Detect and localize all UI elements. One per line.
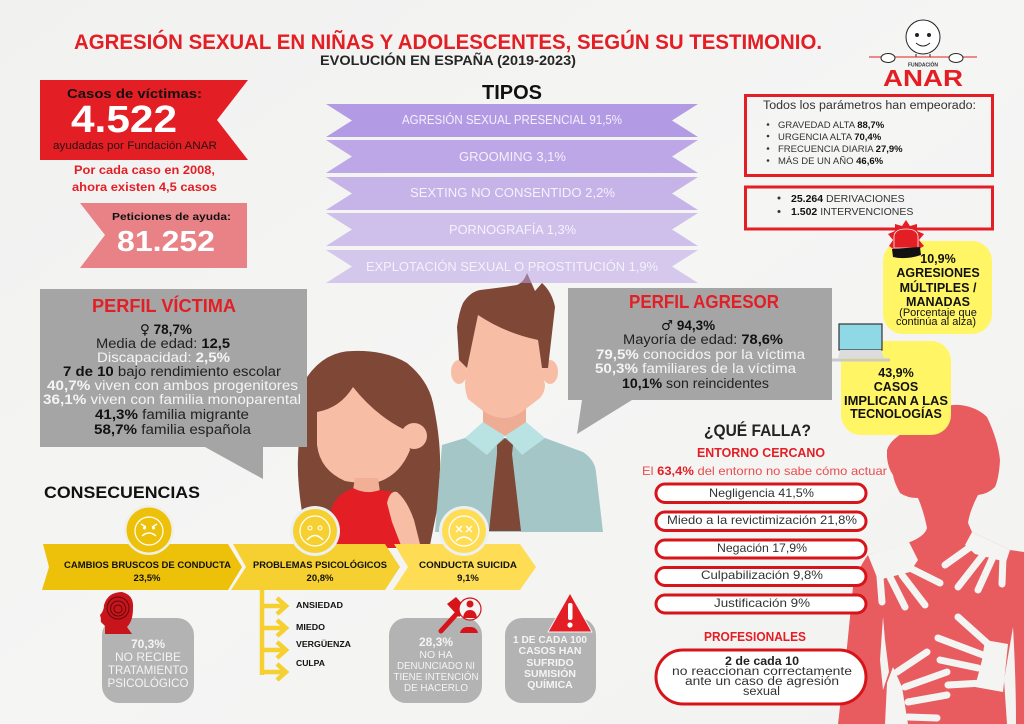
panel: tecnologías: TECNOLOGÍAS: [850, 406, 942, 421]
banner: peticiones de ayuda: [80, 203, 247, 268]
pill: profesionales: sexual: [743, 686, 780, 698]
panel: derivaciones e intervenciones: [746, 187, 992, 229]
pill: miedo a la revictimización: [656, 512, 866, 530]
arrow: problemas psicológicos: 20,8%: [307, 573, 334, 584]
icon: gavel and person: [441, 597, 481, 633]
panel: perfil víctima: Discapacidad: 2,5%: [97, 350, 230, 365]
panel: perfil víctima: 36,1% viven con familia monoparental: [43, 392, 301, 407]
panel: tecnologías: IMPLICAN A LAS: [844, 394, 948, 408]
pill: profesionales: ante un caso de agresión: [685, 676, 839, 688]
panel: tipos list: SEXTING NO CONSENTIDO 2,2%: [410, 185, 615, 200]
panel: sumisión química: SUFRIDO: [526, 657, 574, 669]
icon: siren: [888, 220, 924, 258]
arrow: conducta suicida: 9,1%: [457, 573, 479, 584]
panel: agresiones múltiples: continúa al alza): [896, 316, 976, 328]
panel: agresiones múltiples: AGRESIONES: [896, 266, 980, 280]
logo: Fundación ANAR: ANAR: [883, 65, 963, 91]
pill: negligencia: [656, 484, 866, 502]
panel: denuncia: DE HACERLO: [404, 682, 468, 694]
banner: casos de víctimas: ayudadas por Fundación ANAR: [53, 140, 217, 152]
pill: profesionales: no reaccionan correctamente: [672, 666, 852, 678]
panel: perfil víctima: Media de edad: 12,5: [96, 336, 231, 351]
panel: parámetros: GRAVEDAD ALTA 88,7%: [778, 120, 885, 131]
panel: denuncia: DENUNCIADO NI: [397, 660, 475, 672]
panel: sumisión química: CASOS HAN: [518, 645, 582, 657]
panel: tipos list: EXPLOTACIÓN SEXUAL O PROSTITUCIÓN 1,9%: [366, 259, 658, 274]
arrow: conducta suicida: [393, 544, 536, 590]
panel: perfil agresor: 50,3% familiares de la víctima: [595, 361, 797, 376]
banner: casos de víctimas: [40, 80, 248, 160]
list: problemas psicológicos: ANSIEDAD: [296, 601, 343, 610]
panel: perfil agresor: ♂ 94,3%: [661, 318, 715, 334]
list: problemas psicológicos: [296, 601, 351, 668]
pill: profesionales: [656, 650, 866, 704]
icon: head with spiral: [100, 592, 133, 634]
panel: parámetros: MÁS DE UN AÑO 46,6%: [778, 156, 884, 167]
panel: perfil agresor: Mayoría de edad: 78,6%: [623, 332, 783, 347]
panel: denuncia: NO HA: [419, 649, 453, 661]
pill: negligencia: Negligencia 41,5%: [709, 486, 814, 500]
pill: miedo a la revictimización: Miedo a la revictimización 21,8%: [667, 513, 857, 527]
pill: culpabilización: Culpabilización 9,8%: [701, 568, 823, 582]
pill: negación: Negación 17,9%: [717, 541, 807, 555]
panel: tratamiento psicológico: PSICOLÓGICO: [108, 675, 188, 690]
banner: peticiones de ayuda: 81.252: [117, 226, 215, 258]
panel: tecnologías: [841, 341, 951, 435]
logo: Fundación ANAR: FUNDACIÓN: [908, 60, 938, 68]
panel: parámetros: URGENCIA ALTA 70,4%: [778, 132, 882, 143]
arrow: conducta suicida: CONDUCTA SUICIDA: [419, 560, 517, 571]
panel: agresiones múltiples: (Porcentaje que: [899, 307, 977, 319]
panel: tipos list: PORNOGRAFÍA 1,3%: [449, 222, 576, 237]
title: AGRESIÓN SEXUAL EN NIÑAS Y ADOLESCENTES, SEGÚN SU TESTIMONIO.: [74, 30, 822, 54]
panel: parámetros: Todos los parámetros han empeorado:: [763, 100, 976, 112]
panel: denuncia: 28,3%: [419, 635, 453, 649]
logo: Fundación ANAR: [869, 20, 977, 91]
list: problemas psicológicos: CULPA: [296, 659, 325, 668]
banner: casos de víctimas: 4.522: [71, 99, 177, 141]
arrow: cambios bruscos de conducta: CAMBIOS BRUSCOS DE CONDUCTA: [64, 560, 231, 571]
heading: profesionales: PROFESIONALES: [704, 630, 806, 644]
pill: negación: [656, 540, 866, 558]
panel: perfil víctima: 58,7% familia española: [94, 422, 252, 437]
illustration: body silhouette with hands: [838, 405, 1024, 724]
icon: warning triangle: [548, 593, 592, 632]
panel: perfil víctima: [40, 289, 307, 479]
pill: culpabilización: [656, 568, 866, 586]
panel: sumisión química: SUMISIÓN: [524, 667, 576, 680]
icon: sad face: [290, 506, 340, 556]
panel: perfil víctima: ♀ 78,7%: [140, 322, 192, 338]
panel: derivaciones e intervenciones: 25.264 DERIVACIONES: [791, 193, 905, 205]
pill: profesionales: 2 de cada 10: [725, 656, 799, 668]
arrow: problemas psicológicos: [231, 544, 400, 590]
panel: tipos list: AGRESIÓN SEXUAL PRESENCIAL 91,5%: [402, 112, 622, 127]
panel: sumisión química: 1 DE CADA 100: [513, 634, 587, 646]
heading: entorno cercano: ENTORNO CERCANO: [697, 445, 825, 460]
panel: agresiones múltiples: MÚLTIPLES /: [900, 280, 977, 295]
panel: agresiones múltiples: [883, 241, 992, 334]
arrow: cambios bruscos de conducta: 23,5%: [134, 573, 161, 584]
panel: agresiones múltiples: 10,9%: [920, 252, 956, 266]
panel: tipos list: [326, 104, 698, 283]
panel: sumisión química: [505, 618, 596, 703]
panel: sumisión química: QUÍMICA: [527, 678, 573, 691]
panel: tratamiento psicológico: 70,3%: [131, 637, 165, 651]
panel: agresiones múltiples: MANADAS: [906, 295, 970, 309]
icon: dead face: [439, 506, 489, 556]
illustration: victim girl: [298, 351, 440, 548]
icon: angry face: [124, 505, 174, 555]
panel: tecnologías: CASOS: [874, 380, 918, 394]
panel: tratamiento psicológico: [102, 618, 194, 703]
panel: parámetros: [746, 96, 992, 176]
callout: comparison with 2008: Por cada caso en 2008,: [74, 165, 215, 177]
panel: tratamiento psicológico: NO RECIBE: [115, 650, 181, 664]
heading: qué falla: ¿QUÉ FALLA?: [704, 421, 811, 440]
panel: parámetros: FRECUENCIA DIARIA 27,9%: [778, 144, 903, 155]
callout: comparison with 2008: [72, 165, 217, 194]
panel: perfil agresor: PERFIL AGRESOR: [629, 291, 779, 312]
panel: perfil víctima: 7 de 10 bajo rendimiento escolar: [63, 364, 282, 379]
pill: justificación: [656, 595, 866, 613]
panel: tratamiento psicológico: TRATAMIENTO: [108, 663, 188, 677]
icon: tree of arrows: [262, 590, 286, 680]
panel: perfil agresor: 10,1% son reincidentes: [622, 376, 769, 391]
panel: tipos list: GROOMING 3,1%: [459, 149, 566, 164]
heading: tipos: TIPOS: [482, 82, 542, 104]
list: problemas psicológicos: VERGÜENZA: [296, 640, 351, 649]
icon: laptop: [832, 324, 890, 362]
panel: perfil agresor: 79,5% conocidos por la víctima: [596, 347, 806, 362]
callout: comparison with 2008: ahora existen 4,5 casos: [72, 182, 217, 194]
arrow: cambios bruscos de conducta: [42, 544, 242, 590]
panel: perfil víctima: PERFIL VÍCTIMA: [92, 295, 236, 316]
heading: consecuencias: CONSECUENCIAS: [44, 483, 200, 502]
subtitle: EVOLUCIÓN EN ESPAÑA (2019-2023): [320, 53, 576, 68]
pill: justificación: Justificación 9%: [714, 596, 810, 610]
text: entorno no sabe actuar: El 63,4% del entorno no sabe cómo actuar: [642, 464, 887, 478]
banner: peticiones de ayuda: Peticiones de ayuda:: [112, 211, 231, 223]
panel: perfil víctima: 41,3% familia migrante: [95, 407, 249, 422]
banner: casos de víctimas: Casos de víctimas:: [67, 86, 202, 101]
list: problemas psicológicos: MIEDO: [296, 623, 325, 632]
panel: denuncia: TIENE INTENCIÓN: [394, 670, 478, 683]
panel: denuncia: [389, 618, 482, 703]
arrow: problemas psicológicos: PROBLEMAS PSICOLÓGICOS: [253, 559, 387, 571]
panel: perfil agresor: [568, 288, 832, 434]
illustration: aggressor man: [435, 273, 603, 532]
panel: derivaciones e intervenciones: 1.502 INTERVENCIONES: [791, 206, 913, 218]
panel: perfil víctima: 40,7% viven con ambos progenitores: [47, 378, 298, 393]
panel: tecnologías: 43,9%: [878, 366, 914, 380]
